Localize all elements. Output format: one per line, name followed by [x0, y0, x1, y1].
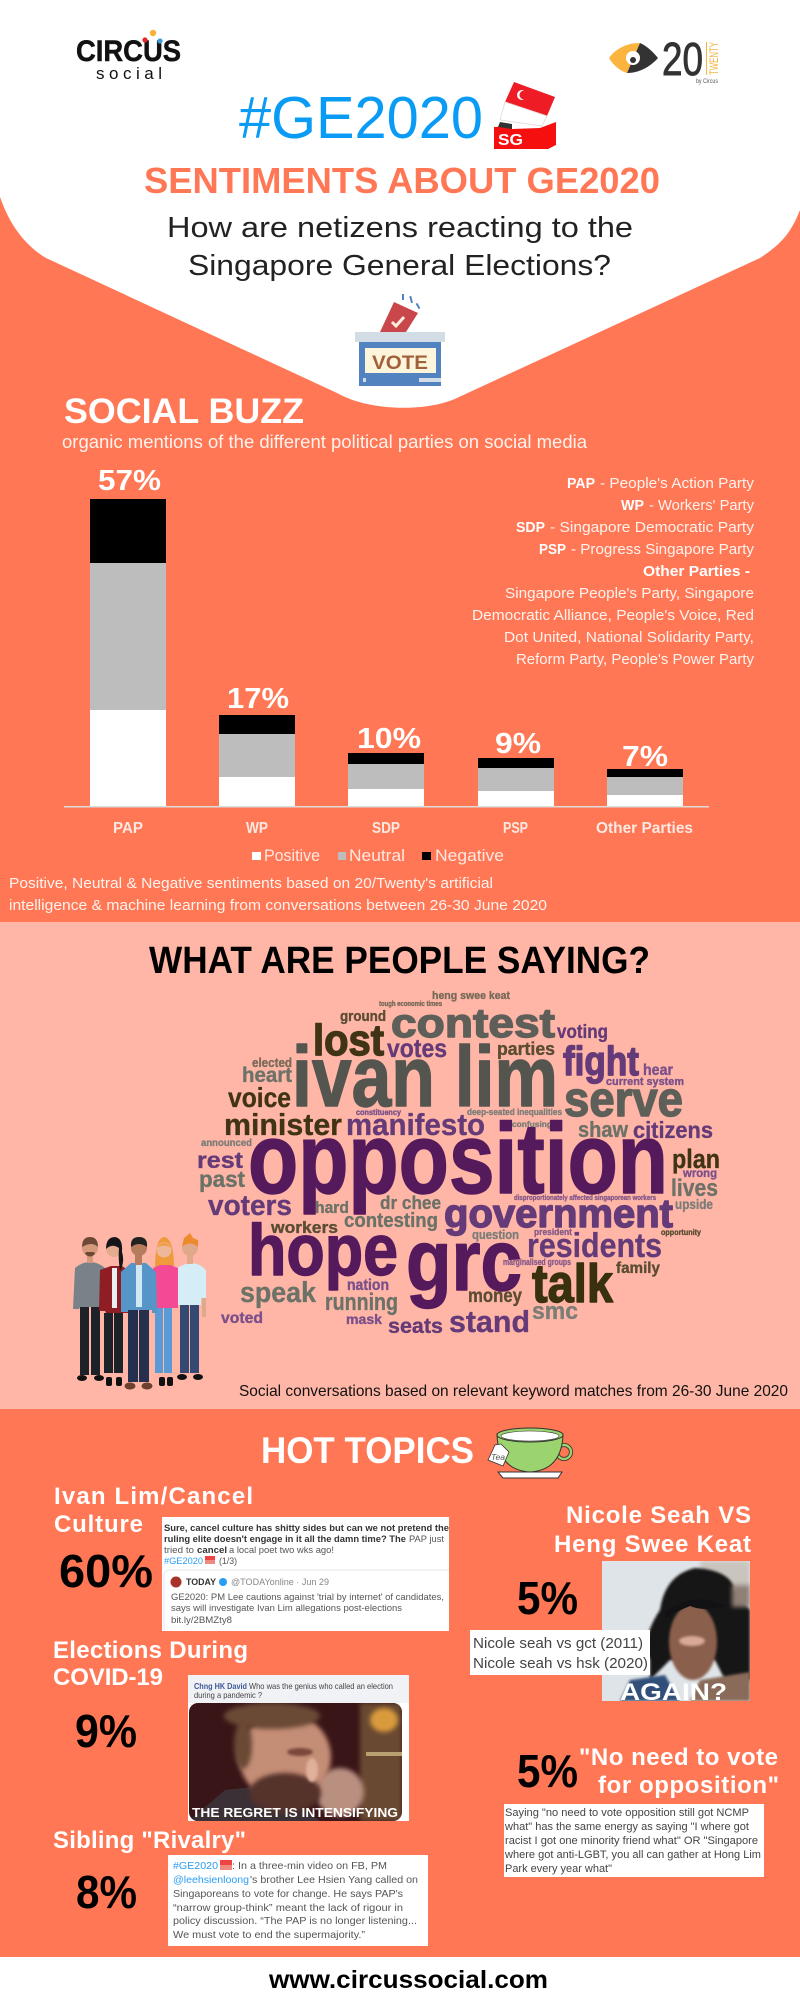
word cloud: minister [224, 1107, 342, 1142]
comment card: quote: Saying "no need to vote opposition still got NCMP [505, 1807, 749, 1819]
topic title [54, 1483, 253, 1538]
word cloud: government [444, 1192, 673, 1236]
word cloud: talk [532, 1254, 614, 1314]
axis labels: WP [246, 820, 268, 837]
party name key: - Workers' Party [649, 497, 754, 514]
icon: Singapore flag in ballot box [494, 82, 556, 149]
bar chart: party mentions [64, 465, 709, 865]
title hashtag: #GE2020 [239, 85, 483, 151]
party name key [472, 475, 755, 668]
party name key: Singapore People's Party, Singapore [505, 585, 754, 602]
meme photo: AGAIN? [620, 1679, 727, 1706]
person: woman in red jacket [99, 1237, 128, 1386]
subtitle question [167, 212, 633, 282]
word cloud: seats [388, 1315, 443, 1338]
word cloud: question [472, 1227, 519, 1242]
bar: SDP 10%: 10% [357, 723, 421, 755]
word cloud: rest [197, 1147, 243, 1173]
icon: tea cup [488, 1428, 571, 1478]
word cloud: residents [527, 1227, 662, 1265]
tweet card: cancel culture: says will investigate Ivan Lim allegations post-elections [171, 1603, 402, 1614]
bar: PSP 9%: 9% [495, 728, 541, 760]
word cloud: grc [406, 1213, 522, 1309]
meme photo [602, 1561, 750, 1706]
comment card: quote: where got anti-LGBT, you all can gather at Hong Lim [504, 1849, 761, 1861]
party name key: PSP [539, 541, 566, 558]
topic title: "No need to vote [579, 1744, 778, 1771]
party name key: SDP [516, 519, 545, 536]
chart legend: Neutral [349, 846, 405, 865]
footer: website: www.circussocial.com [268, 1966, 548, 1994]
word cloud: plan [672, 1144, 720, 1174]
topic: Ivan Lim / Cancel Culture [54, 1483, 449, 1631]
comment card: quote: Park every year what" [505, 1863, 612, 1875]
word cloud: hard [315, 1198, 349, 1217]
tweet card: cancel culture: a local poet two wks ago! [229, 1545, 334, 1556]
word cloud: constituency [356, 1108, 402, 1117]
party name key: - Progress Singapore Party [571, 541, 754, 558]
tweet card: Lee Hsien Yang: “narrow group-think” meant the lack of rigour in [173, 1902, 403, 1914]
word cloud: smc [532, 1298, 578, 1325]
topic title: Sibling "Rivalry" [53, 1827, 246, 1854]
word cloud: contest [391, 1000, 555, 1046]
word cloud: contesting [344, 1210, 438, 1232]
word cloud: disproportionately affected singaporean workers [514, 1195, 656, 1202]
tweet card: cancel culture: Sure, cancel culture has shitty sides but can we not pretend the [164, 1523, 449, 1534]
panel: hot topics [0, 1409, 800, 1957]
word cloud: voters [208, 1190, 292, 1222]
meme image [189, 1703, 402, 1821]
panel: what are people saying [0, 922, 800, 1409]
logo: Circus Social: social [96, 64, 162, 83]
word cloud: opposition [248, 1103, 668, 1215]
word cloud: manifesto [346, 1107, 485, 1142]
comment card with meme: Who was the genius who called an election [249, 1681, 393, 1691]
word cloud: marginalised groups [503, 1257, 571, 1267]
topic title [53, 1637, 248, 1691]
methodology footnote: Positive, Neutral & Negative sentiments based on 20/Twenty's artificial [9, 875, 493, 892]
tweet card: cancel culture [162, 1517, 449, 1631]
stat: 5%: 5% [517, 1572, 578, 1624]
tweet card: Lee Hsien Yang: Singaporeans to vote for change. He says PAP's [173, 1888, 403, 1900]
word cloud: fight [563, 1038, 639, 1084]
party name key: Other Parties - [643, 563, 750, 580]
tweet card: Lee Hsien Yang: #GE2020 [173, 1860, 218, 1872]
axis labels: PSP [503, 820, 528, 837]
caption: conversations source: Social conversations based on relevant keyword matches from 26-30 June 2020 [239, 1383, 788, 1400]
person: man in light blue shirt [177, 1233, 206, 1380]
word cloud: nation [347, 1277, 389, 1294]
word cloud: mask [346, 1311, 382, 1327]
header and social buzz background [0, 0, 800, 922]
topic: Nicole Seah vs Heng Swee Keat [470, 1502, 751, 1706]
word cloud: past [199, 1166, 245, 1192]
bar: Other Parties 7%: 7% [622, 741, 668, 773]
tweet card: Lee Hsien Yang: @leehsienloong [173, 1874, 249, 1886]
logo: 20 Twenty: by Circus [696, 79, 718, 85]
word cloud: running [325, 1289, 398, 1316]
tweet card: cancel culture: TODAY [186, 1577, 217, 1588]
word cloud: voting [557, 1022, 608, 1043]
word cloud: voice [228, 1082, 291, 1113]
word cloud: tough economic times [379, 1001, 442, 1008]
word cloud: parties [497, 1039, 555, 1059]
icon: vote box: VOTE [372, 353, 428, 374]
tweet card: Lee Hsien Yang: : In a three-min video on FB, PM [232, 1860, 387, 1872]
word cloud: votes [387, 1033, 447, 1063]
logo: Circus Social [76, 30, 181, 83]
tweet card: Lee Hsien Yang: 's brother Lee Hsien Yang called on [250, 1874, 418, 1886]
icon: Singapore flag in ballot box: SG [498, 132, 523, 149]
word cloud: opportunity [661, 1228, 701, 1237]
word cloud: confusing [512, 1120, 552, 1129]
tweet card: Lee Hsien Yang [168, 1855, 428, 1946]
axis labels: Other Parties [596, 820, 693, 837]
bar: WP 17% [219, 683, 295, 807]
comment card: Nicole Seah: Nicole seah vs gct (2011) [473, 1635, 643, 1652]
axis labels: PAP [113, 820, 143, 837]
sub-heading: organic mentions: organic mentions of the different political parties on social media [62, 432, 588, 452]
party name key: - Singapore Democratic Party [550, 519, 755, 536]
topic title: for opposition" [598, 1772, 779, 1799]
logo: 20 Twenty: 20 [662, 33, 703, 85]
word cloud: current system [606, 1076, 684, 1088]
word cloud: dr chee [380, 1193, 441, 1213]
word cloud: speak [240, 1277, 317, 1309]
topic title [579, 1744, 779, 1799]
party name key: Dot United, National Solidarity Party, [504, 629, 754, 646]
party name key: Reform Party, People's Power Party [516, 651, 754, 668]
comment card with meme [188, 1675, 409, 1821]
word cloud: stand [449, 1304, 530, 1339]
word cloud: hear [643, 1062, 673, 1079]
tweet card: cancel culture: GE2020: PM Lee cautions against 'trial by internet' of candidates, [171, 1592, 444, 1603]
tweet card: Lee Hsien Yang: policy discussion. “The PAP is no longer listening... [173, 1915, 417, 1927]
tweet card: cancel culture: (1/3) [219, 1556, 237, 1567]
comment card: quote: racist I got one minority friend what" OR "Singapore [505, 1835, 758, 1847]
word cloud: citizens [633, 1117, 713, 1143]
methodology footnote [9, 875, 547, 914]
topic title: COVID-19 [53, 1664, 163, 1691]
topic title: Ivan Lim/Cancel [54, 1483, 253, 1510]
stat: 9%: 9% [75, 1705, 137, 1757]
topic title: Elections During [53, 1637, 248, 1664]
word cloud: workers [270, 1218, 338, 1237]
axis labels: SDP [372, 820, 400, 837]
word cloud: lives [671, 1175, 718, 1202]
person: grey shirt man [73, 1237, 105, 1381]
comment card with meme: during a pandemic ? [194, 1690, 262, 1700]
comment card: quote [504, 1804, 764, 1877]
word cloud: serve [564, 1073, 683, 1127]
party name key: PAP [567, 475, 595, 492]
party name key: Democratic Alliance, People's Voice, Red [472, 607, 754, 624]
word cloud: wrong [682, 1166, 717, 1180]
bar: WP 17%: 17% [227, 683, 289, 715]
tweet card: cancel culture: PAP just [409, 1534, 444, 1545]
bar: PSP 9% [478, 728, 554, 807]
word cloud: shaw [578, 1117, 629, 1142]
tweet card: cancel culture: tried to [164, 1545, 194, 1556]
word cloud: family [616, 1260, 660, 1277]
tweet card: cancel culture: cancel [197, 1545, 227, 1556]
tweet card: Lee Hsien Yang: We must vote to end the supermajority.” [173, 1929, 366, 1941]
subtitle question: Singapore General Elections? [188, 250, 611, 282]
topic title: Culture [54, 1511, 143, 1538]
stat: 8%: 8% [76, 1866, 137, 1918]
tweet card: cancel culture: bit.ly/2BMZty8 [171, 1615, 232, 1626]
logo: 20 Twenty [609, 33, 721, 85]
axis labels [113, 820, 693, 837]
party name key: WP [621, 497, 644, 514]
word cloud: lost [313, 1016, 384, 1065]
person: woman in pink top [153, 1237, 178, 1386]
chart legend [252, 846, 504, 865]
topic title: Heng Swee Keat [554, 1531, 751, 1558]
subtitle question: How are netizens reacting to the [167, 212, 633, 244]
chart legend: Negative [435, 846, 504, 865]
word cloud: hope [248, 1211, 398, 1291]
comment card with meme: Chng HK David [194, 1681, 247, 1691]
topic: Elections During COVID-19 [53, 1637, 409, 1821]
word cloud: heart [242, 1064, 292, 1087]
comment card: Nicole Seah: Nicole seah vs hsk (2020) [473, 1655, 648, 1672]
stat: 60%: 60% [59, 1545, 153, 1597]
word cloud: ivan lim [292, 1030, 558, 1125]
bar: SDP 10% [348, 723, 424, 807]
word cloud: elected [252, 1055, 292, 1070]
word cloud: announced [201, 1138, 252, 1149]
word cloud: money [468, 1286, 522, 1307]
topic title [554, 1502, 751, 1558]
meme image: THE REGRET IS INTENSIFYING [192, 1805, 398, 1820]
methodology footnote: intelligence & machine learning from conversations between 26-30 June 2020 [9, 897, 547, 914]
heading: what are people saying: WHAT ARE PEOPLE SAYING? [149, 940, 650, 982]
logo: 20 Twenty: TWENTY [707, 42, 721, 75]
tweet card: cancel culture: #GE2020 [164, 1556, 203, 1567]
word cloud: deep-seated inequalities [467, 1107, 562, 1117]
party name key: - People's Action Party [600, 475, 754, 492]
topic: Sibling Rivalry [53, 1827, 428, 1946]
tweet card: cancel culture: ruling elite doesn't engage in it all the damn time? The [164, 1534, 406, 1545]
stat: 5%: 5% [517, 1745, 578, 1797]
word cloud: upside [675, 1196, 713, 1212]
word cloud: heng swee keat [432, 990, 510, 1002]
footer: website [0, 1957, 800, 2000]
chart legend: Positive [264, 846, 320, 865]
person: man in blue blazer [121, 1237, 157, 1390]
icon: vote box [355, 294, 445, 386]
word cloud: voted [221, 1310, 263, 1327]
word cloud: ground [340, 1008, 386, 1025]
icon: tea cup: Tea [491, 1453, 506, 1462]
heading: sentiments: SENTIMENTS ABOUT GE2020 [144, 160, 660, 201]
comment card: quote: what" has the same energy as saying "I where got [504, 1821, 749, 1833]
panel: social buzz [9, 392, 755, 914]
tweet card: cancel culture: @TODAYonline · Jun 29 [231, 1577, 329, 1588]
bar: Other Parties 7% [607, 741, 683, 807]
word cloud: president [534, 1227, 572, 1237]
heading: hot topics: HOT TOPICS [261, 1430, 474, 1471]
topic: No need to vote for opposition [504, 1744, 779, 1877]
topic title: Nicole Seah VS [566, 1502, 751, 1529]
illustration: group of people [73, 1233, 206, 1390]
bar: PAP 57% [90, 465, 166, 807]
comment card: Nicole Seah [470, 1630, 650, 1675]
word cloud [197, 990, 720, 1339]
bar: PAP 57%: 57% [98, 465, 161, 497]
heading: social buzz: SOCIAL BUZZ [64, 392, 304, 431]
logo: Circus Social: CIRCUS [76, 35, 181, 68]
